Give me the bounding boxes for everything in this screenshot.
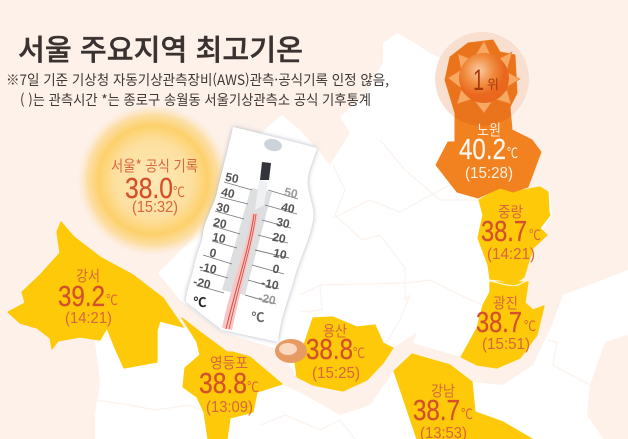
- bulb: [260, 162, 271, 180]
- scale numbers: -20: [257, 290, 277, 308]
- red column: [222, 213, 258, 330]
- scale numbers: 10: [272, 246, 288, 262]
- district: Jungnang: 중랑: [498, 201, 523, 222]
- district: Nowon: (15:28): [465, 165, 513, 182]
- panel: Seoul official record: [77, 104, 229, 256]
- scale numbers: 30: [215, 200, 231, 216]
- district: Yeongdeungpo: 영등포: [210, 352, 248, 373]
- scale numbers: 40: [280, 200, 296, 216]
- panel: Seoul official record: 38.0: [125, 173, 173, 205]
- district: Gwangjin: 광진: [493, 292, 518, 313]
- district: Yeongdeungpo: [182, 318, 282, 439]
- fingertip: [275, 339, 307, 363]
- note text: ※7일 기준 기상청 자동기상관측장비(AWS)관측·공식기록 인정 않음,: [6, 70, 389, 90]
- district: Nowon: 노원: [477, 119, 501, 140]
- scale numbers: 50: [283, 185, 299, 201]
- district: Gangnam: 강남: [431, 380, 455, 401]
- district: Jungnang: (14:21): [487, 246, 535, 263]
- district: Gangseo: ℃: [106, 290, 118, 310]
- district: Gangseo: 강서: [76, 265, 100, 286]
- scale numbers: [192, 170, 299, 325]
- icon: first place sun badge: [448, 41, 520, 113]
- district: Yongsan: 용산: [323, 320, 347, 341]
- district: Gwangjin: (15:51): [482, 336, 530, 353]
- district: Nowon: ℃: [507, 143, 518, 163]
- scale numbers: -10: [198, 259, 218, 277]
- icon: first place sun badge: 위: [487, 74, 499, 93]
- scale numbers: 50: [224, 170, 240, 186]
- scale numbers: 20: [212, 215, 228, 232]
- district: Gwangjin: 38.7: [476, 307, 522, 339]
- gray tube band: [222, 188, 272, 295]
- scale lines: [196, 182, 298, 304]
- note text: ( )는 관측시간 *는 종로구 송월동 서울기상관측소 공식 기후통계: [20, 90, 371, 110]
- district: Jungnang: 38.7: [481, 216, 527, 248]
- district: Nowon: [435, 32, 541, 198]
- district: Gangnam: [394, 354, 532, 439]
- district: Jungnang: ℃: [529, 225, 541, 245]
- title: 서울 주요지역 최고기온: [18, 27, 303, 69]
- district: Yeongdeungpo: (13:09): [206, 399, 253, 416]
- district: Gangseo: [8, 222, 183, 368]
- scale numbers: 20: [271, 230, 287, 246]
- scale numbers: -10: [260, 275, 280, 293]
- scale numbers: ℃: [193, 295, 207, 310]
- district: Yongsan: [295, 317, 393, 391]
- map: district boundary lines: [95, 140, 590, 439]
- panel: Seoul official record: (15:32): [132, 199, 178, 216]
- district: Yongsan: 38.8: [306, 334, 353, 366]
- scale numbers: 0: [208, 245, 218, 261]
- scale numbers: 30: [275, 215, 291, 231]
- map: northern Seoul: [158, 33, 552, 391]
- district: Yeongdeungpo: 38.8: [199, 368, 247, 400]
- scale numbers: 0: [271, 261, 281, 277]
- icon: first place sun badge: 1: [473, 64, 484, 97]
- district: Jungnang: [478, 187, 550, 286]
- district: Yongsan: ℃: [353, 343, 365, 363]
- scale numbers: ℃: [251, 310, 265, 325]
- district: Yeongdeungpo: ℃: [247, 377, 259, 397]
- district: Gwangjin: ℃: [524, 316, 536, 336]
- icon: thermometer: [186, 127, 317, 363]
- scale numbers: -20: [192, 274, 212, 292]
- hole: [263, 137, 283, 153]
- panel: Seoul official record: 서울* 공식 기록: [111, 155, 198, 176]
- district: Nowon: 40.2: [459, 134, 506, 166]
- district: Gangnam: ℃: [461, 404, 473, 424]
- note text: [6, 70, 389, 110]
- panel: Seoul official record: ℃: [173, 182, 185, 202]
- body: [186, 127, 317, 342]
- scale numbers: 10: [211, 230, 227, 246]
- district: Gangseo: 39.2: [58, 281, 105, 313]
- district: Yongsan: (15:25): [312, 365, 360, 382]
- scale numbers: 40: [220, 185, 236, 201]
- soft shadow: [186, 127, 317, 342]
- district: Gwangjin: [461, 282, 544, 368]
- district: Gangseo: (14:21): [65, 310, 112, 327]
- district: Gangnam: 38.7: [413, 395, 460, 427]
- map: southern Seoul: [95, 270, 628, 439]
